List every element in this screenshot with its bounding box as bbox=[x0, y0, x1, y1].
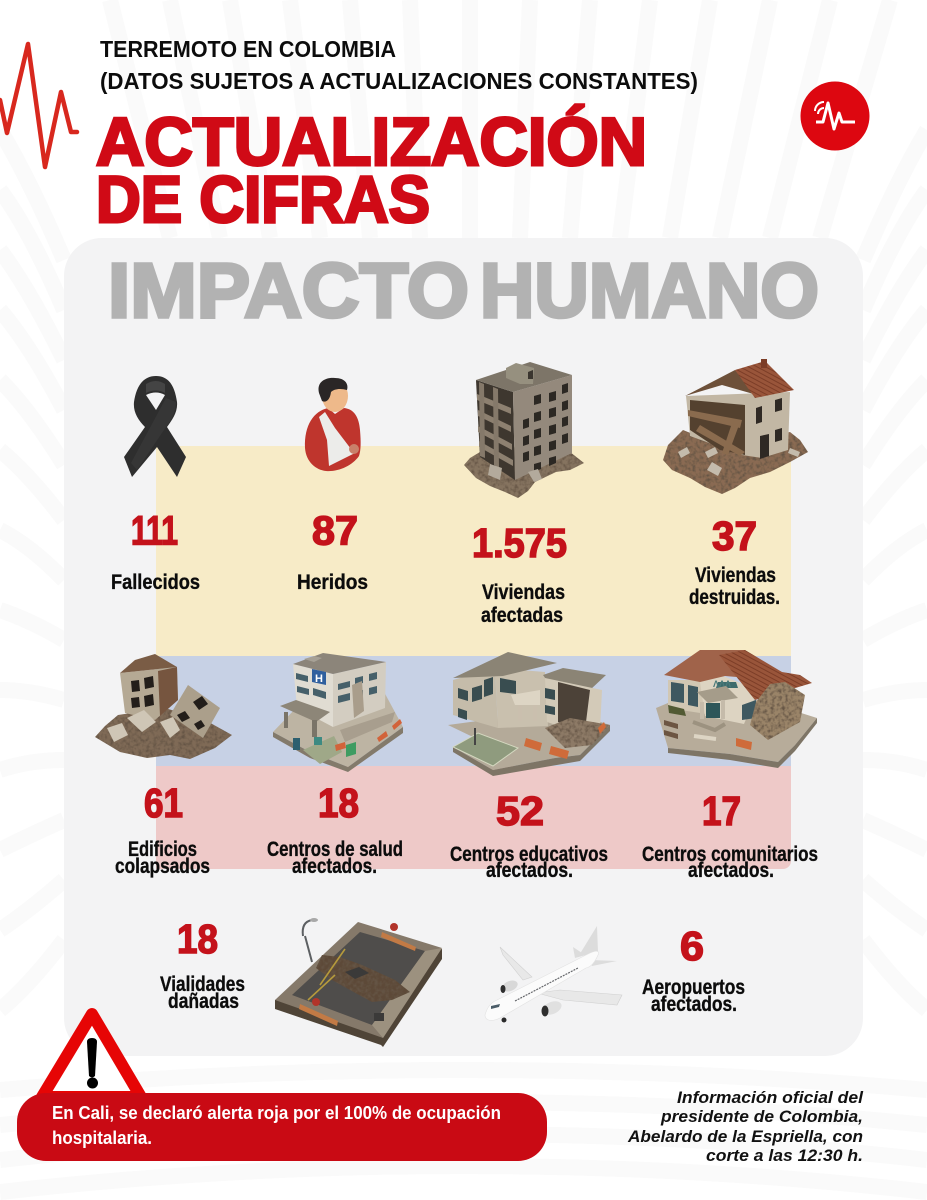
stats row 1 bbox=[111, 508, 780, 627]
stats row 2: Centros educativos bbox=[450, 843, 608, 866]
icon: damaged hospital bbox=[273, 653, 403, 772]
callout: red alert: hospitalaria. bbox=[52, 1128, 152, 1148]
stats row 3: Vialidades bbox=[160, 973, 245, 996]
callout: red alert bbox=[17, 1093, 547, 1161]
heading: impacto humano: HUMANO bbox=[480, 248, 819, 334]
stats row 1: Viviendas bbox=[695, 564, 776, 587]
header text: TERREMOTO EN COLOMBIA bbox=[100, 36, 396, 62]
title bbox=[96, 104, 647, 236]
stats row 3: dañadas bbox=[168, 990, 239, 1013]
stats row 1: Viviendas bbox=[482, 581, 565, 604]
header text bbox=[100, 36, 698, 94]
icon: airplane bbox=[485, 926, 622, 1022]
stats row 1: 1.575 bbox=[472, 520, 567, 566]
stats row 1: Heridos bbox=[297, 571, 368, 594]
source note bbox=[627, 1088, 864, 1165]
source note: corte a las 12:30 h. bbox=[706, 1146, 863, 1165]
stats row 3: 18 bbox=[177, 916, 218, 962]
stats row 2: 52 bbox=[496, 788, 544, 834]
stats row 1: 37 bbox=[712, 513, 757, 559]
stats row 1: afectadas bbox=[481, 604, 563, 627]
stats row 2: 18 bbox=[318, 780, 359, 826]
stats row 2 bbox=[115, 780, 818, 882]
title: ACTUALIZACIÓN bbox=[96, 104, 647, 180]
callout: red alert: En Cali, se declaró alerta roja por el 100% de ocupación bbox=[52, 1103, 501, 1123]
stats row 2: afectados. bbox=[486, 859, 573, 882]
header text: (DATOS SUJETOS A ACTUALIZACIONES CONSTANTES) bbox=[100, 68, 698, 94]
heartbeat line bbox=[0, 44, 77, 167]
stats row 1: Fallecidos bbox=[111, 571, 200, 594]
logo bbox=[800, 82, 870, 150]
stats row 1: destruidas. bbox=[689, 586, 780, 609]
stats row 2: 17 bbox=[702, 788, 741, 834]
heading: impacto humano bbox=[108, 248, 819, 334]
stats row 2: Edificios bbox=[128, 838, 197, 861]
source note: presidente de Colombia, bbox=[660, 1107, 863, 1126]
panel: impact card bbox=[64, 238, 863, 1056]
heading: impacto humano: IMPACTO bbox=[108, 248, 469, 334]
stats row 2: Centros comunitarios bbox=[642, 843, 818, 866]
stats row 3: 6 bbox=[680, 923, 704, 969]
stats row 3 bbox=[160, 916, 745, 1016]
icon: damaged hospital: H bbox=[315, 673, 323, 685]
stats row 2: 61 bbox=[144, 780, 183, 826]
flag bands bbox=[156, 446, 791, 869]
stats row 3: Aeropuertos bbox=[642, 976, 745, 999]
icon: damaged apartment building bbox=[464, 362, 584, 498]
icon: collapsed buildings bbox=[95, 654, 232, 759]
stats row 3: afectados. bbox=[651, 993, 737, 1016]
icon: destroyed house bbox=[663, 359, 808, 494]
icon: damaged community center: ΛΛΛ bbox=[713, 679, 731, 689]
icon: injured person bbox=[305, 378, 361, 471]
icon: damaged school bbox=[448, 652, 610, 776]
source note: Información oficial del bbox=[677, 1088, 864, 1107]
icon: damaged community center bbox=[656, 650, 817, 768]
stats row 2: afectados. bbox=[688, 859, 774, 882]
title: DE CIFRAS bbox=[96, 162, 430, 236]
icon: damaged road bbox=[275, 918, 442, 1047]
stats row 2: Centros de salud bbox=[267, 838, 403, 861]
stats row 1: 111 bbox=[131, 508, 178, 554]
icon: black ribbon bbox=[124, 376, 186, 477]
icon: warning triangle bbox=[42, 1014, 141, 1097]
stats row 2: colapsados bbox=[115, 855, 210, 878]
stats row 2: afectados. bbox=[292, 855, 377, 878]
stats row 1: 87 bbox=[312, 508, 358, 554]
source note: Abelardo de la Espriella, con bbox=[627, 1127, 863, 1146]
